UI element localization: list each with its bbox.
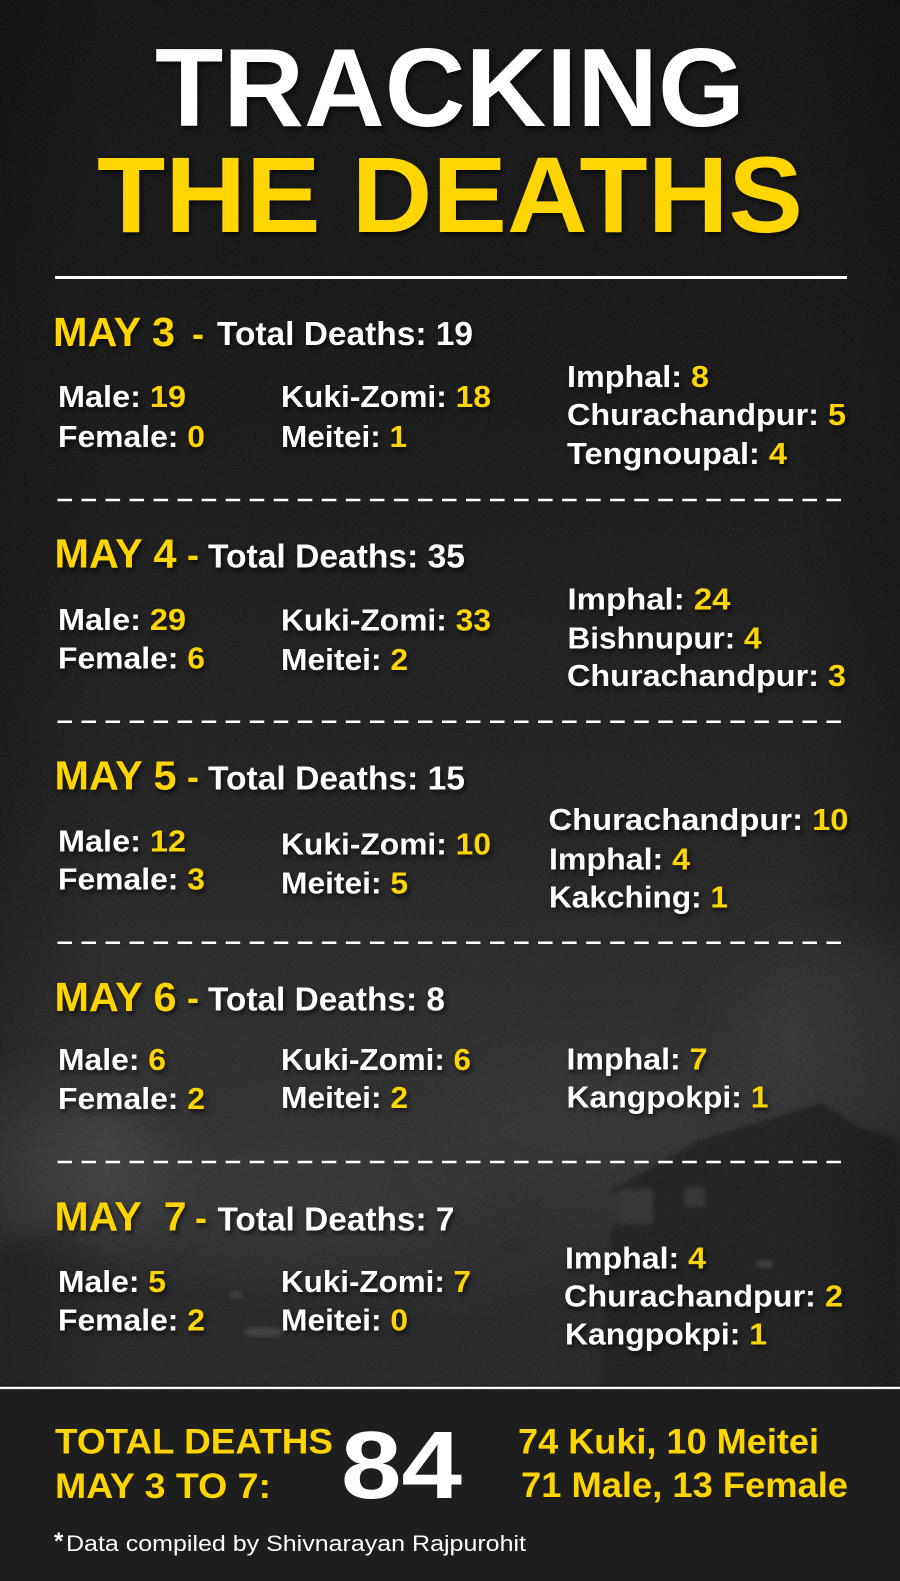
panel: May 6: Meitei: 2 <box>281 1081 408 1115</box>
panel: May 5: Imphal: 4 <box>549 842 690 876</box>
panel: May 4: Meitei: 2 <box>281 643 408 677</box>
breakdown <box>518 1423 848 1505</box>
panel: May 4: MAY 4 <box>54 531 177 577</box>
breakdown: 71 Male, 13 Female <box>521 1466 848 1505</box>
panel: May 5: Kakching: 1 <box>549 881 728 915</box>
panel: May 6: - <box>187 977 199 1018</box>
panel: May 5: Total Deaths: 15 <box>208 759 465 796</box>
breakdown: 74 Kuki, 10 Meitei <box>518 1423 819 1462</box>
panel: May 4: Churachandpur: 3 <box>567 659 846 693</box>
panel: May 3: Female: 0 <box>58 420 205 454</box>
panel: May 5: Male: 12 <box>58 825 186 859</box>
panel: May 3: Meitei: 1 <box>281 420 407 454</box>
panel: May 4 <box>54 531 846 693</box>
panel: May 3: - <box>192 313 204 354</box>
panel: May 4: Imphal: 24 <box>568 582 731 616</box>
panel: May 3: Total Deaths: 19 <box>217 315 473 352</box>
panel: May 7: Male: 5 <box>58 1265 166 1299</box>
source note: Data compiled by Shivnarayan Rajpurohit <box>66 1531 526 1556</box>
panel: May 3: Imphal: 8 <box>567 360 709 394</box>
total deaths label <box>55 1423 333 1506</box>
title: THE DEATHS <box>97 134 803 255</box>
panel: May 3: Male: 19 <box>58 380 186 414</box>
panel: May 3: Tengnoupal: 4 <box>567 437 787 471</box>
panel: totals footer <box>0 1386 900 1581</box>
total number: 84 <box>341 1412 462 1519</box>
panel: May 7: Kangpokpi: 1 <box>565 1318 767 1352</box>
panel: May 3: Kuki-Zomi: 18 <box>281 380 491 414</box>
panel: May 3 <box>53 309 846 471</box>
panel: May 6: Total Deaths: 8 <box>208 980 445 1018</box>
panel: May 5: Churachandpur: 10 <box>548 803 848 837</box>
panel: May 6: MAY 6 <box>54 974 176 1020</box>
total deaths label: MAY 3 TO 7: <box>55 1467 271 1506</box>
panel: May 3: Churachandpur: 5 <box>567 398 846 432</box>
panel: May 5: Female: 3 <box>58 862 205 896</box>
panel: May 7: Total Deaths: 7 <box>218 1200 454 1238</box>
source note: * <box>54 1528 64 1555</box>
panel: May 7: MAY 7 <box>54 1194 186 1240</box>
panel: May 4: Bishnupur: 4 <box>568 621 762 655</box>
panel: May 6: Imphal: 7 <box>566 1043 708 1077</box>
panel: May 4: Kuki-Zomi: 33 <box>281 603 491 637</box>
panel: May 7 <box>54 1194 843 1352</box>
title <box>97 26 803 255</box>
panel: May 6: Kuki-Zomi: 6 <box>281 1043 471 1077</box>
panel: May 7: Meitei: 0 <box>281 1304 408 1338</box>
panel: May 5: Kuki-Zomi: 10 <box>281 827 491 861</box>
panel: May 5 <box>54 752 848 915</box>
panel: May 7: Kuki-Zomi: 7 <box>281 1265 471 1299</box>
panel: May 7: Imphal: 4 <box>565 1242 706 1276</box>
total deaths label: TOTAL DEATHS <box>55 1423 333 1462</box>
panel: May 7: - <box>195 1197 207 1238</box>
panel: May 4: Total Deaths: 35 <box>208 538 465 575</box>
panel: May 7: Churachandpur: 2 <box>564 1280 843 1314</box>
panel: May 6: Female: 2 <box>58 1082 205 1116</box>
panel: May 4: Male: 29 <box>58 603 186 637</box>
panel: May 5: Meitei: 5 <box>281 866 408 900</box>
panel: May 6: Kangpokpi: 1 <box>566 1080 769 1114</box>
panel: May 6: Male: 6 <box>58 1043 166 1077</box>
panel: May 5: MAY 5 <box>54 752 176 798</box>
panel: May 7: Female: 2 <box>58 1304 205 1338</box>
panel: May 4: - <box>187 534 199 575</box>
panel: May 5: - <box>187 756 199 797</box>
title: TRACKING <box>155 26 745 150</box>
panel: May 3: MAY 3 <box>53 309 175 355</box>
panel: May 6 <box>54 974 769 1116</box>
panel: May 4: Female: 6 <box>58 641 205 675</box>
